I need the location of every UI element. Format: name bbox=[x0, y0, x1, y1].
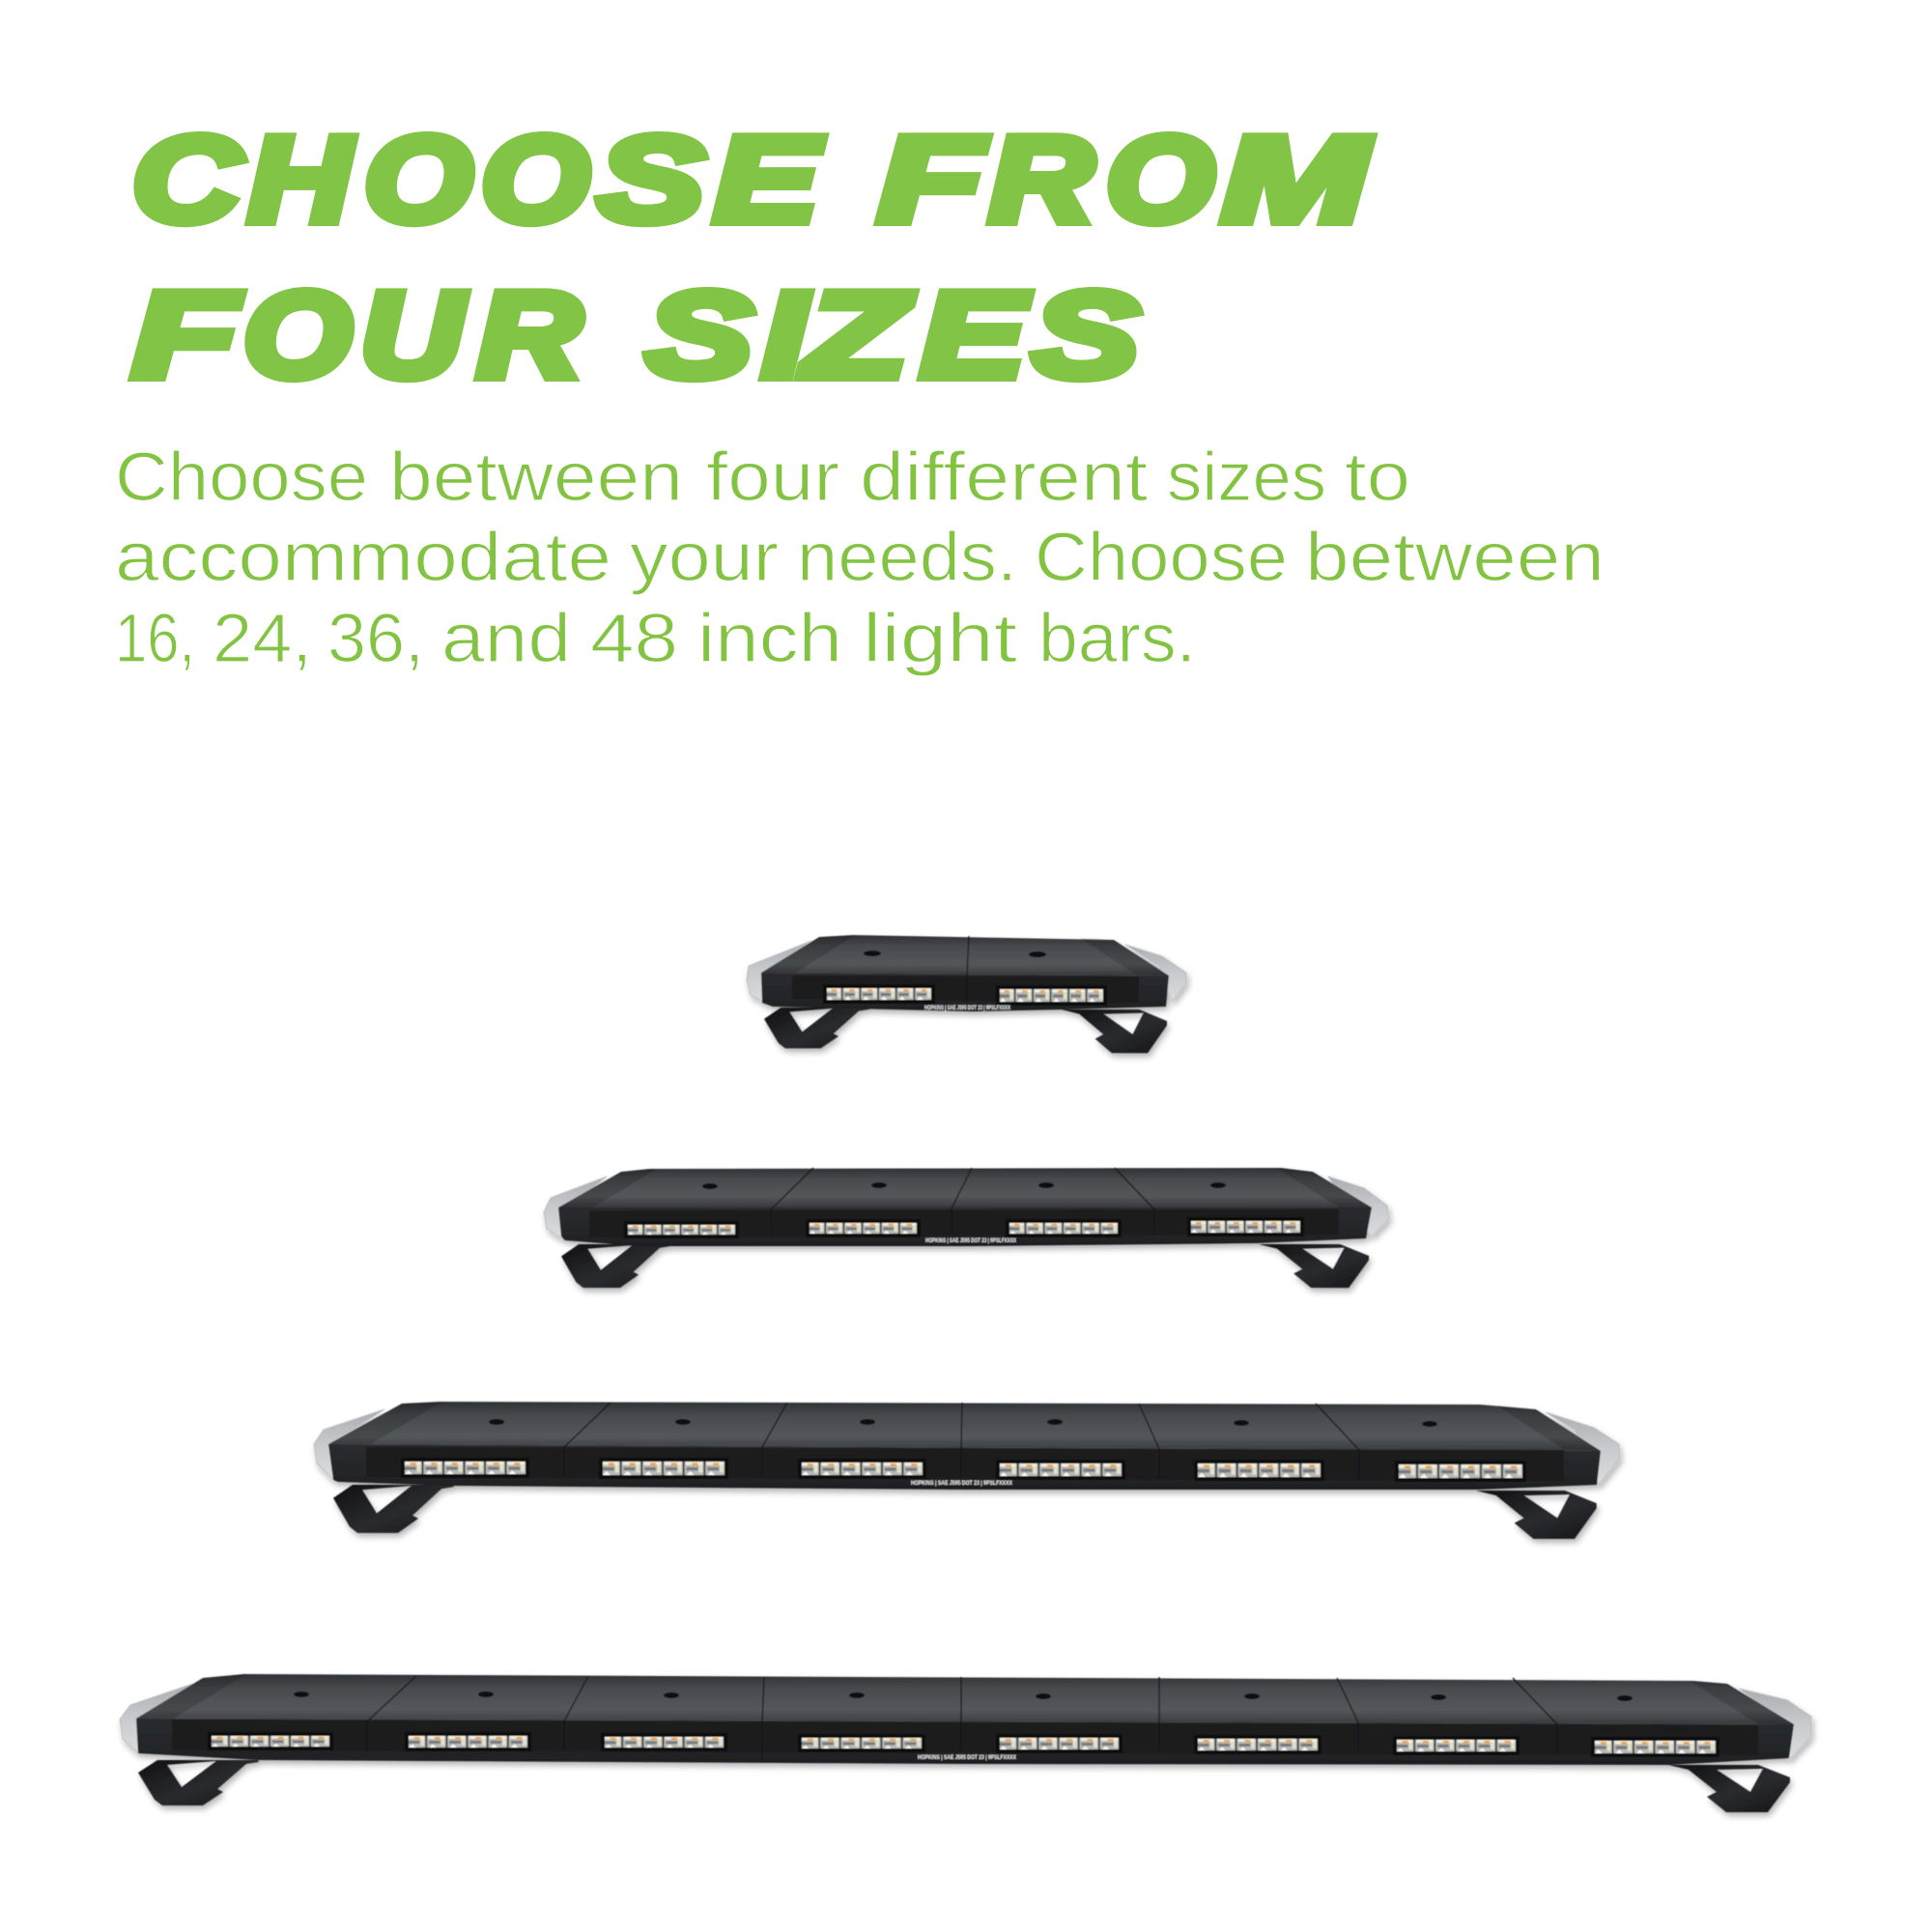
description line 3: 48 bbox=[590, 601, 678, 677]
front panel bbox=[172, 1719, 1758, 1755]
description line 1: to bbox=[1345, 440, 1410, 516]
description text bbox=[115, 440, 1605, 677]
light bar: 36 inch bbox=[314, 1402, 1620, 1539]
description line 3: 24, bbox=[213, 601, 312, 677]
title line 2: O bbox=[243, 267, 352, 403]
title line 2: U bbox=[360, 267, 466, 403]
front face bbox=[328, 1444, 1601, 1490]
front face bbox=[558, 1208, 1372, 1246]
title line 2: Z bbox=[801, 267, 913, 403]
description line 3: bars. bbox=[1038, 601, 1196, 677]
description line 3: 36, bbox=[327, 601, 424, 677]
description line 1: four bbox=[706, 440, 839, 516]
right mounting bracket bbox=[1668, 1765, 1790, 1812]
mounting holes bbox=[294, 1691, 1633, 1701]
description line 3: light bbox=[863, 601, 1017, 677]
LED modules bbox=[825, 986, 1105, 1004]
left clear lens bbox=[544, 1177, 607, 1238]
top surface bbox=[761, 935, 1169, 976]
product marking: HOPKINS | SAE J595 DOT 23 | 9PSLFXXXX bbox=[924, 1006, 1010, 1011]
title line 2: I bbox=[762, 267, 810, 403]
left clear lens bbox=[120, 1684, 193, 1753]
front panel bbox=[589, 1209, 1339, 1237]
top surface bbox=[136, 1674, 1794, 1724]
mounting holes bbox=[489, 1419, 1437, 1427]
right mounting bracket bbox=[1062, 1009, 1167, 1053]
product marking: HOPKINS | SAE J595 DOT 23 | 9PSLFXXXX bbox=[911, 1481, 1012, 1487]
left clear lens bbox=[314, 1409, 384, 1480]
description line 2: needs. bbox=[797, 520, 1017, 596]
title line 1: O bbox=[364, 111, 472, 247]
left mounting bracket bbox=[764, 1008, 869, 1048]
title line 2: S bbox=[1033, 267, 1139, 403]
description line 3: 16, bbox=[115, 601, 195, 677]
title line 2: E bbox=[921, 267, 1030, 403]
light bar: 48 inch bbox=[120, 1674, 1811, 1812]
title line 1: R bbox=[989, 111, 1094, 247]
left mounting bracket bbox=[138, 1760, 259, 1805]
right clear lens bbox=[1739, 1689, 1811, 1760]
right clear lens bbox=[1328, 1177, 1389, 1236]
description line 1: different bbox=[860, 440, 1148, 516]
top surface bbox=[328, 1402, 1601, 1451]
description line 1: sizes bbox=[1167, 440, 1326, 516]
title line 1: S bbox=[598, 111, 704, 247]
title bbox=[132, 111, 1371, 403]
title line 1: O bbox=[1106, 111, 1214, 247]
right clear lens bbox=[1546, 1412, 1620, 1485]
description line 2: accommodate bbox=[115, 520, 611, 596]
front panel bbox=[792, 976, 1139, 1003]
top surface bbox=[558, 1168, 1372, 1208]
front face bbox=[761, 973, 1169, 1011]
description line 2: Choose bbox=[1035, 520, 1288, 596]
LED modules bbox=[626, 1219, 1302, 1236]
title line 1: E bbox=[714, 111, 823, 247]
right mounting bracket bbox=[1476, 1491, 1597, 1539]
LED modules bbox=[403, 1460, 1524, 1480]
description line 3: and bbox=[441, 601, 571, 677]
description line 2: your bbox=[630, 520, 779, 596]
right clear lens bbox=[1125, 945, 1186, 1002]
left clear lens bbox=[747, 941, 811, 1002]
left mounting bracket bbox=[561, 1244, 671, 1288]
description line 1: between bbox=[389, 440, 683, 516]
description line 2: between bbox=[1305, 520, 1605, 596]
description line 1: Choose bbox=[115, 440, 368, 516]
title line 2: F bbox=[132, 267, 241, 403]
mounting holes bbox=[702, 1182, 1226, 1189]
title line 1: O bbox=[481, 111, 589, 247]
light bar: 16 inch bbox=[747, 935, 1186, 1053]
LED modules bbox=[210, 1734, 1718, 1755]
front face bbox=[136, 1719, 1794, 1765]
front panel bbox=[366, 1447, 1564, 1481]
mounting holes bbox=[864, 951, 1046, 957]
light bar: 24 inch bbox=[544, 1168, 1389, 1288]
left mounting bracket bbox=[333, 1485, 454, 1533]
title line 2: S bbox=[646, 267, 753, 403]
product marking: HOPKINS | SAE J595 DOT 23 | 9PSLFXXXX bbox=[918, 1755, 1016, 1761]
description line 3: inch bbox=[697, 601, 842, 677]
product marking: HOPKINS | SAE J595 DOT 23 | 9PSLFXXXX bbox=[925, 1238, 1016, 1244]
title line 1: H bbox=[248, 111, 354, 247]
title line 1: C bbox=[132, 111, 242, 247]
title line 1: F bbox=[878, 111, 986, 247]
right mounting bracket bbox=[1259, 1244, 1369, 1288]
title line 2: R bbox=[477, 267, 582, 403]
title line 1: M bbox=[1222, 111, 1371, 247]
